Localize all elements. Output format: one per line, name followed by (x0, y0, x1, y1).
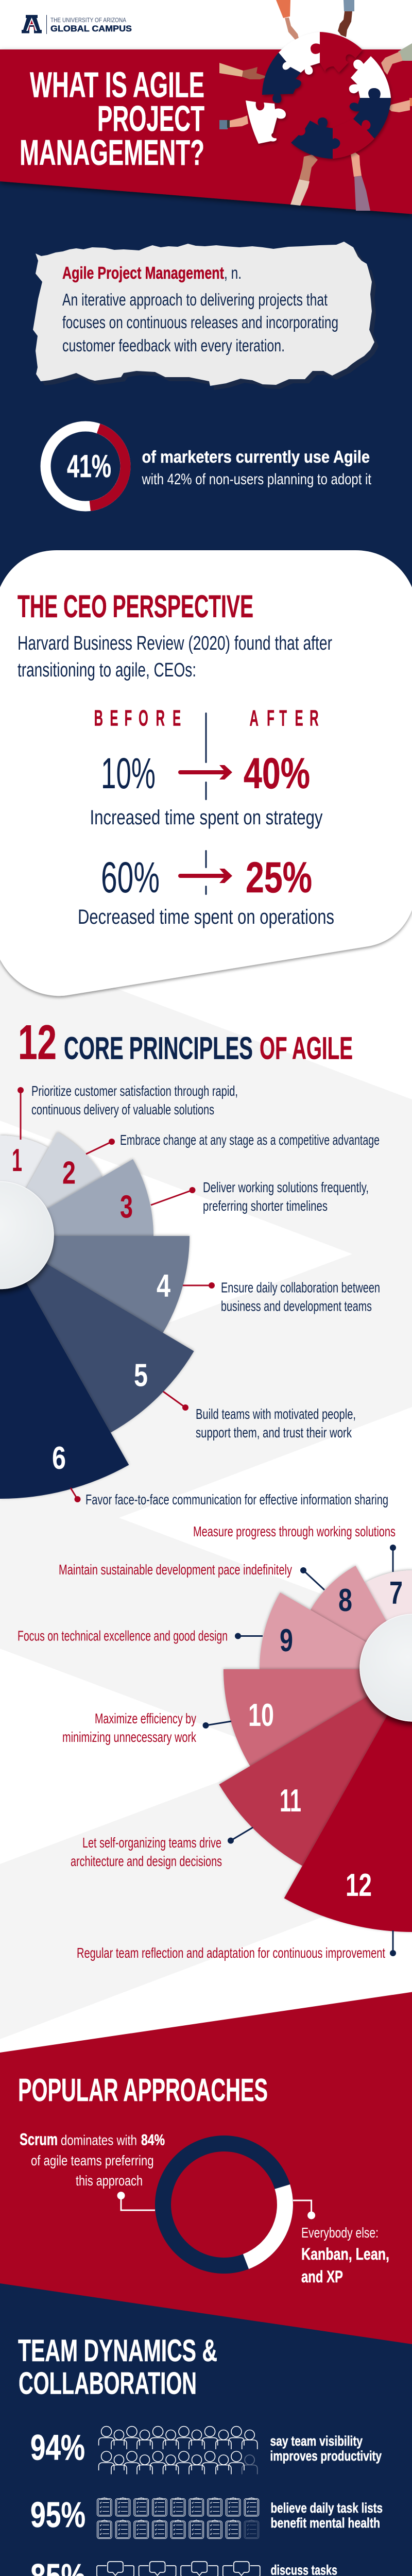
panel: CEO perspective (0, 550, 412, 996)
slice numbers (12, 1143, 170, 1476)
slice numbers: 6 (52, 1440, 66, 1476)
principle 5: support them, and trust their work (196, 1425, 352, 1440)
principle 10: minimizing unnecessary work (62, 1729, 197, 1745)
stat: 94% team visibility: improves productivity (270, 2448, 382, 2464)
principle 11: Let self-organizing teams drive (82, 1835, 221, 1851)
navy section background (0, 175, 412, 721)
comparison: operations (78, 853, 334, 928)
slice 9 (260, 1592, 412, 1669)
stat: 95% daily task lists: benefit mental health (271, 2515, 380, 2531)
principle 2 (86, 1132, 380, 1154)
heading: CEO perspective: THE CEO PERSPECTIVE (18, 589, 253, 624)
header logo (22, 15, 132, 34)
principle 1: continuous delivery of valuable solutions (31, 1101, 214, 1117)
comparison: strategy (90, 749, 322, 829)
heading: 12 core principles: OF AGILE (260, 1030, 353, 1065)
slice numbers: 3 (120, 1190, 133, 1225)
before after labels: BEFORE (94, 705, 181, 731)
hand: top left (276, 0, 299, 40)
principle 3: preferring shorter timelines (203, 1198, 328, 1214)
hand: right upper (381, 43, 412, 75)
callout: scrum: of agile teams preferring (31, 2153, 153, 2168)
principle 5: Build teams with motivated people, (196, 1406, 356, 1422)
slice 10 (224, 1669, 412, 1766)
wheel hub (360, 1614, 412, 1721)
stat: 94% team visibility: say team visibility (270, 2433, 363, 2449)
before after labels: AFTER (250, 705, 319, 731)
icon: block A logo (22, 15, 42, 33)
illustration: hands assembling puzzle (219, 0, 412, 211)
stat: 85% discuss tasks (30, 2556, 337, 2576)
arrow (178, 765, 232, 779)
stat: 94% team visibility (30, 2427, 382, 2474)
principle 1 (18, 1083, 238, 1140)
principle 1: Prioritize customer satisfaction through rapid, (31, 1083, 238, 1099)
definition text (62, 263, 338, 355)
callout: scrum: 84% (141, 2132, 165, 2149)
definition text: customer feedback with every iteration. (62, 336, 285, 355)
principle 10 (62, 1710, 231, 1745)
before after labels (94, 705, 319, 731)
center divider (205, 713, 207, 895)
comparison: operations: 25% (246, 853, 312, 902)
comparison: strategy: 10% (101, 749, 156, 798)
heading: TEAM DYNAMICS & (18, 2333, 217, 2368)
slice numbers: 9 (280, 1623, 293, 1658)
header logo: GLOBAL CAMPUS (50, 24, 132, 33)
donut chart: 41% (45, 427, 126, 506)
slice 1 (0, 1136, 48, 1236)
callout: everybody else (293, 2200, 389, 2286)
wheel hub (0, 1182, 54, 1289)
stat: 94% team visibility: 94% (30, 2428, 85, 2468)
comparison: operations: Decreased time spent on operations (78, 906, 334, 928)
intro text (18, 633, 332, 681)
heading: 12 core principles (18, 1015, 353, 1070)
hand: right middle (388, 98, 412, 112)
heading: POPULAR APPROACHES (18, 2073, 268, 2108)
slice numbers: 5 (134, 1358, 148, 1394)
hand: bottom left (290, 155, 318, 206)
panel: definition torn paper (33, 242, 379, 390)
hand: left lower (219, 115, 248, 129)
principle 8 (59, 1562, 324, 1590)
principle 8: Maintain sustainable development pace indefinitely (59, 1562, 292, 1578)
slice 6 (0, 1236, 129, 1499)
slice numbers: 1 (12, 1143, 22, 1178)
comparison: strategy: Increased time spent on strategy (90, 806, 322, 829)
hand: bottom right (351, 152, 370, 211)
callout: scrum: Scrum (20, 2130, 58, 2149)
callout: scrum: dominates with (61, 2132, 137, 2148)
stat: 41% of marketers: of marketers currently use Agile (142, 447, 370, 466)
title: WHAT IS AGILE (30, 65, 204, 105)
slice 12 (284, 1669, 412, 1932)
hand: top right (338, 0, 354, 37)
icons: speech bubbles grid (97, 2562, 260, 2576)
slice numbers: 2 (62, 1155, 76, 1191)
section: team dynamics and collaboration (18, 2333, 383, 2576)
slice numbers: 8 (338, 1583, 352, 1618)
definition text: Agile Project Management (62, 263, 224, 282)
callout: everybody else: Everybody else: (301, 2225, 379, 2241)
section: popular approaches (18, 2073, 389, 2286)
slice 4 (0, 1236, 190, 1333)
stat: 95% daily task lists: 95% (30, 2495, 85, 2535)
slice 2 (0, 1132, 102, 1236)
heading (18, 2333, 217, 2401)
principle 11: architecture and design decisions (71, 1853, 222, 1869)
donut chart: scrum share (163, 2143, 285, 2266)
principle 11 (71, 1827, 253, 1869)
icons: people grid (99, 2427, 258, 2474)
principle 12 (77, 1930, 396, 1961)
principle 7 (193, 1523, 396, 1572)
red hero banner (0, 49, 412, 214)
slice 11 (219, 1669, 412, 1866)
comparison: operations: 60% (101, 853, 160, 902)
callout: scrum (20, 2130, 165, 2210)
slice numbers: 7 (389, 1575, 403, 1611)
principle 9: Focus on technical excellence and good design (18, 1628, 228, 1643)
stat: 41% of marketers (45, 427, 372, 506)
slice 8 (311, 1566, 412, 1669)
callout: everybody else: Kanban, Lean, (301, 2245, 389, 2263)
title: PROJECT (97, 98, 204, 139)
title: MANAGEMENT? (20, 132, 204, 173)
heading: COLLABORATION (19, 2366, 197, 2401)
slice numbers: 10 (248, 1698, 274, 1733)
heading: 12 core principles: CORE PRINCIPLES (64, 1030, 253, 1065)
intro text: transitioning to agile, CEOs: (18, 659, 196, 681)
slice numbers: 4 (157, 1268, 170, 1304)
chart: wheel 7 to 12 (219, 1566, 412, 1932)
navy section: team dynamics background (0, 2215, 412, 2576)
comparison: strategy: 40% (244, 749, 310, 798)
slice numbers: 11 (280, 1783, 301, 1819)
stat: 95% daily task lists (30, 2495, 383, 2539)
definition text: , n. (224, 263, 242, 282)
slice 5 (0, 1236, 194, 1433)
callout: scrum: this approach (76, 2173, 143, 2189)
stat: 41% of marketers: 41% (67, 449, 111, 484)
puzzle: pieces (246, 32, 391, 159)
hand: left upper (219, 63, 268, 79)
header logo: THE UNIVERSITY OF ARIZONA (50, 18, 126, 24)
definition text: An iterative approach to delivering projects that (62, 290, 328, 309)
icons: clipboards grid (97, 2498, 259, 2539)
red section: popular approaches background (0, 1992, 412, 2344)
slice 7 (365, 1570, 412, 1669)
slice numbers: 12 (346, 1868, 372, 1903)
title (20, 65, 204, 173)
chart: wheel 1 to 6 (0, 1132, 194, 1499)
slice 3 (0, 1159, 153, 1236)
callout: everybody else: and XP (301, 2267, 343, 2286)
arrow (178, 869, 232, 883)
slice numbers (248, 1575, 403, 1903)
principle 3 (151, 1179, 369, 1214)
principle 10: Maximize efficiency by (95, 1710, 196, 1726)
12 principles chevron background (0, 824, 412, 2061)
heading: 12 core principles: 12 (18, 1015, 57, 1070)
principle 5 (163, 1392, 356, 1440)
principle 4 (183, 1280, 380, 1314)
